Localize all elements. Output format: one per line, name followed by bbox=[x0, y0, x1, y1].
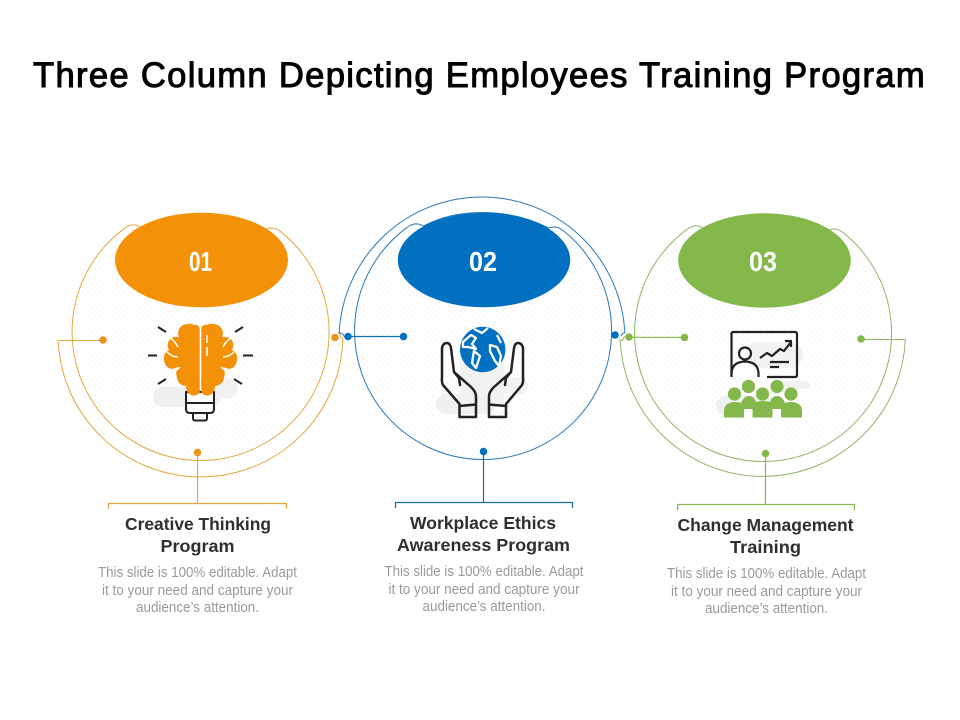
number badge 03: 03 bbox=[749, 246, 777, 277]
number badge 01: 01 bbox=[189, 246, 212, 277]
title: Three Column Depicting Employees Training Program bbox=[33, 56, 926, 95]
heading 1: Creative Thinking bbox=[125, 514, 271, 534]
outer arc 1 bbox=[58, 332, 343, 477]
body text 2: it to your need and capture your bbox=[388, 581, 580, 598]
icon: brain light bulb bbox=[148, 324, 253, 420]
bracket 2 bbox=[396, 452, 572, 508]
body text 1: This slide is 100% editable. Adapt bbox=[98, 564, 298, 581]
number badge 03 bbox=[678, 213, 851, 308]
icon: presenter and audience bbox=[716, 332, 810, 418]
heading 3: Change Management bbox=[678, 515, 854, 535]
bracket 3 bbox=[678, 454, 854, 510]
body text 3: This slide is 100% editable. Adapt bbox=[667, 565, 867, 582]
inner ring 2 bbox=[355, 212, 612, 460]
body text 3: audience’s attention. bbox=[705, 600, 828, 617]
bracket 1 bbox=[108, 452, 286, 509]
heading 3: Training bbox=[730, 537, 801, 557]
body text 1: audience’s attention. bbox=[136, 599, 259, 616]
heading 2: Workplace Ethics bbox=[410, 513, 556, 533]
inner ring 1 bbox=[72, 225, 329, 461]
body text 2: audience’s attention. bbox=[422, 598, 546, 615]
number badge 01 bbox=[115, 213, 288, 307]
outer arc 3 bbox=[620, 336, 905, 476]
panel: column 2 workplace ethics bbox=[339, 197, 625, 615]
body text 1: it to your need and capture your bbox=[102, 582, 293, 599]
number badge 02: 02 bbox=[469, 246, 497, 277]
number badge 02 bbox=[398, 213, 570, 307]
outer arc 2 bbox=[339, 197, 625, 336]
heading 1: Program bbox=[160, 536, 234, 556]
body text 2: This slide is 100% editable. Adapt bbox=[384, 563, 584, 580]
dots and connectors 2 bbox=[344, 331, 619, 455]
body text 3: it to your need and capture your bbox=[671, 583, 862, 600]
inner ring 3 bbox=[635, 226, 892, 462]
dots and connectors 3 bbox=[625, 333, 865, 457]
panel: column 1 creative thinking bbox=[58, 213, 343, 616]
icon: hands holding globe bbox=[436, 327, 528, 417]
dots and connectors 1 bbox=[99, 334, 339, 456]
panel: column 3 change management bbox=[620, 213, 905, 617]
heading 2: Awareness Program bbox=[397, 535, 570, 555]
